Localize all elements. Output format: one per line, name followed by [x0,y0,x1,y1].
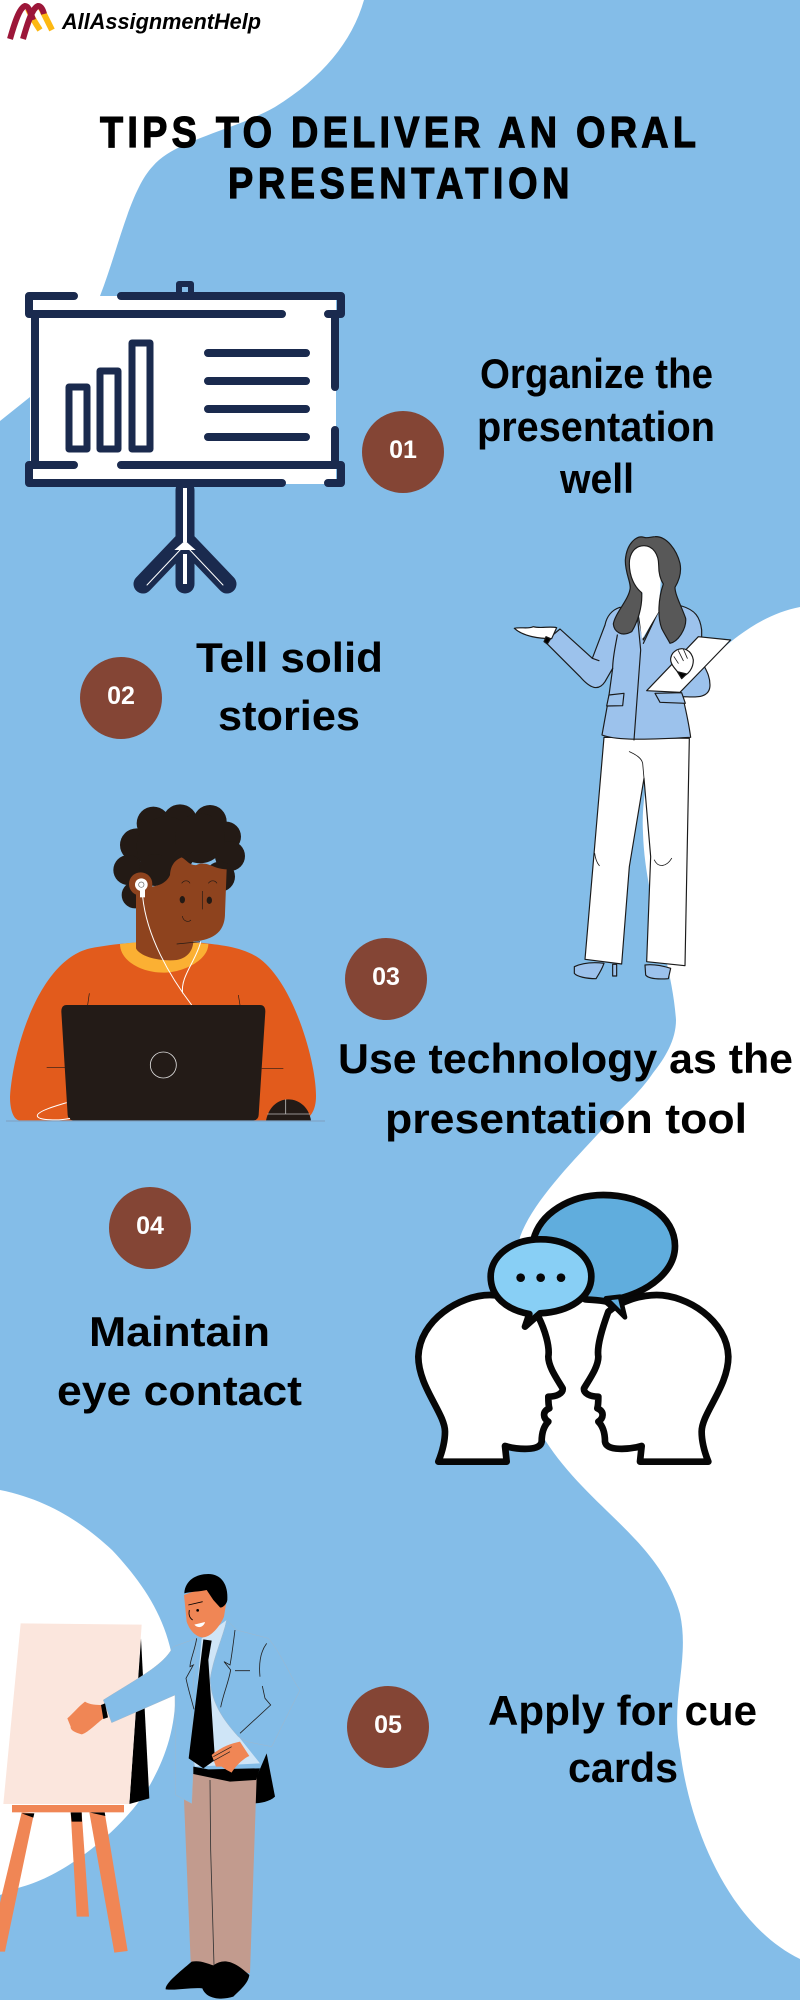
text: organize the presentation well: presentation [477,403,715,450]
number badge 01: 01 [389,436,417,464]
text: apply for cue cards [488,1687,757,1791]
text: use technology as the presentation tool [338,1035,793,1142]
clipboard [647,637,731,692]
hair [613,537,686,643]
left head [418,1295,563,1462]
step 02 [80,634,383,739]
sweater [10,943,316,1121]
easel board shadow [129,1638,149,1804]
easel legs [0,1812,128,1953]
logo [10,6,261,39]
text: apply for cue cards: Apply for cue [488,1687,757,1734]
text: apply for cue cards: cards [568,1744,678,1791]
earphone [135,878,201,1005]
collar [120,942,208,973]
number badge 02 [80,657,162,739]
trousers [585,737,689,966]
illustration: man with laptop [6,804,325,1121]
easel tray [12,1805,124,1812]
hand on hip [212,1742,249,1773]
icon: presentation board [29,284,341,585]
icon: logo mark [10,6,52,39]
number badge 05: 05 [374,1711,402,1739]
text: organize the presentation well: well [559,455,634,502]
laptop [61,1005,265,1121]
illustration: businesswoman [514,537,731,979]
title [100,107,696,208]
text: organize the presentation well [477,350,715,502]
number badge 05 [347,1686,429,1768]
shoes [166,1961,249,1999]
text: tell solid stories: stories [218,692,360,739]
shoulder bag shape behind jacket [254,1753,275,1803]
jacket [103,1638,197,1803]
neck and face [627,544,662,639]
text: maintain eye contact: eye contact [57,1367,302,1414]
tripod stand [143,488,227,585]
title: PRESENTATION [228,158,569,208]
number badge 03 [345,938,427,1020]
big bubble tail [606,1297,625,1317]
logo wordmark: AllAssignmentHelp [61,9,261,34]
step 03 [338,938,793,1142]
step 04 [57,1187,302,1414]
number badge 04: 04 [136,1212,164,1240]
hand right [671,649,693,677]
step 01 [362,350,715,502]
text: use technology as the presentation tool: presentation tool [385,1095,747,1142]
illustration: man at easel [0,1574,300,1999]
pockets [607,693,685,706]
number badge 04 [109,1187,191,1269]
step 05 [347,1686,757,1791]
number badge 01 [362,411,444,493]
shirt [192,1620,260,1767]
number badge 02: 02 [107,682,135,710]
big speech bubble [533,1195,675,1318]
text: tell solid stories [196,634,383,739]
trousers [184,1773,257,1973]
easel board [3,1623,142,1804]
background: right white blob [513,607,800,1959]
text: maintain eye contact: Maintain [89,1308,270,1355]
background: top-left white blob [0,0,364,421]
shoes [574,963,604,979]
pointing hand [67,1702,103,1734]
right head [584,1295,728,1462]
ellipsis dots [516,1273,565,1282]
number badge 03: 03 [372,963,400,991]
jacket [545,606,710,739]
small speech bubble [491,1239,591,1327]
head [184,1574,227,1637]
desk line [6,1119,325,1123]
belt [193,1767,260,1782]
tie [189,1639,215,1768]
background: bottom-left white blob [0,1490,175,1895]
text: maintain eye contact [57,1308,302,1414]
icon: two heads talking [418,1195,728,1462]
hair [113,804,245,908]
text: organize the presentation well: Organize the [480,350,713,397]
text: use technology as the presentation tool: Use technology as the [338,1035,793,1082]
text: tell solid stories: Tell solid [196,634,383,681]
hand left [514,627,557,639]
title: TIPS TO DELIVER AN ORAL [100,107,696,157]
mouse [266,1099,311,1121]
face [136,857,227,960]
